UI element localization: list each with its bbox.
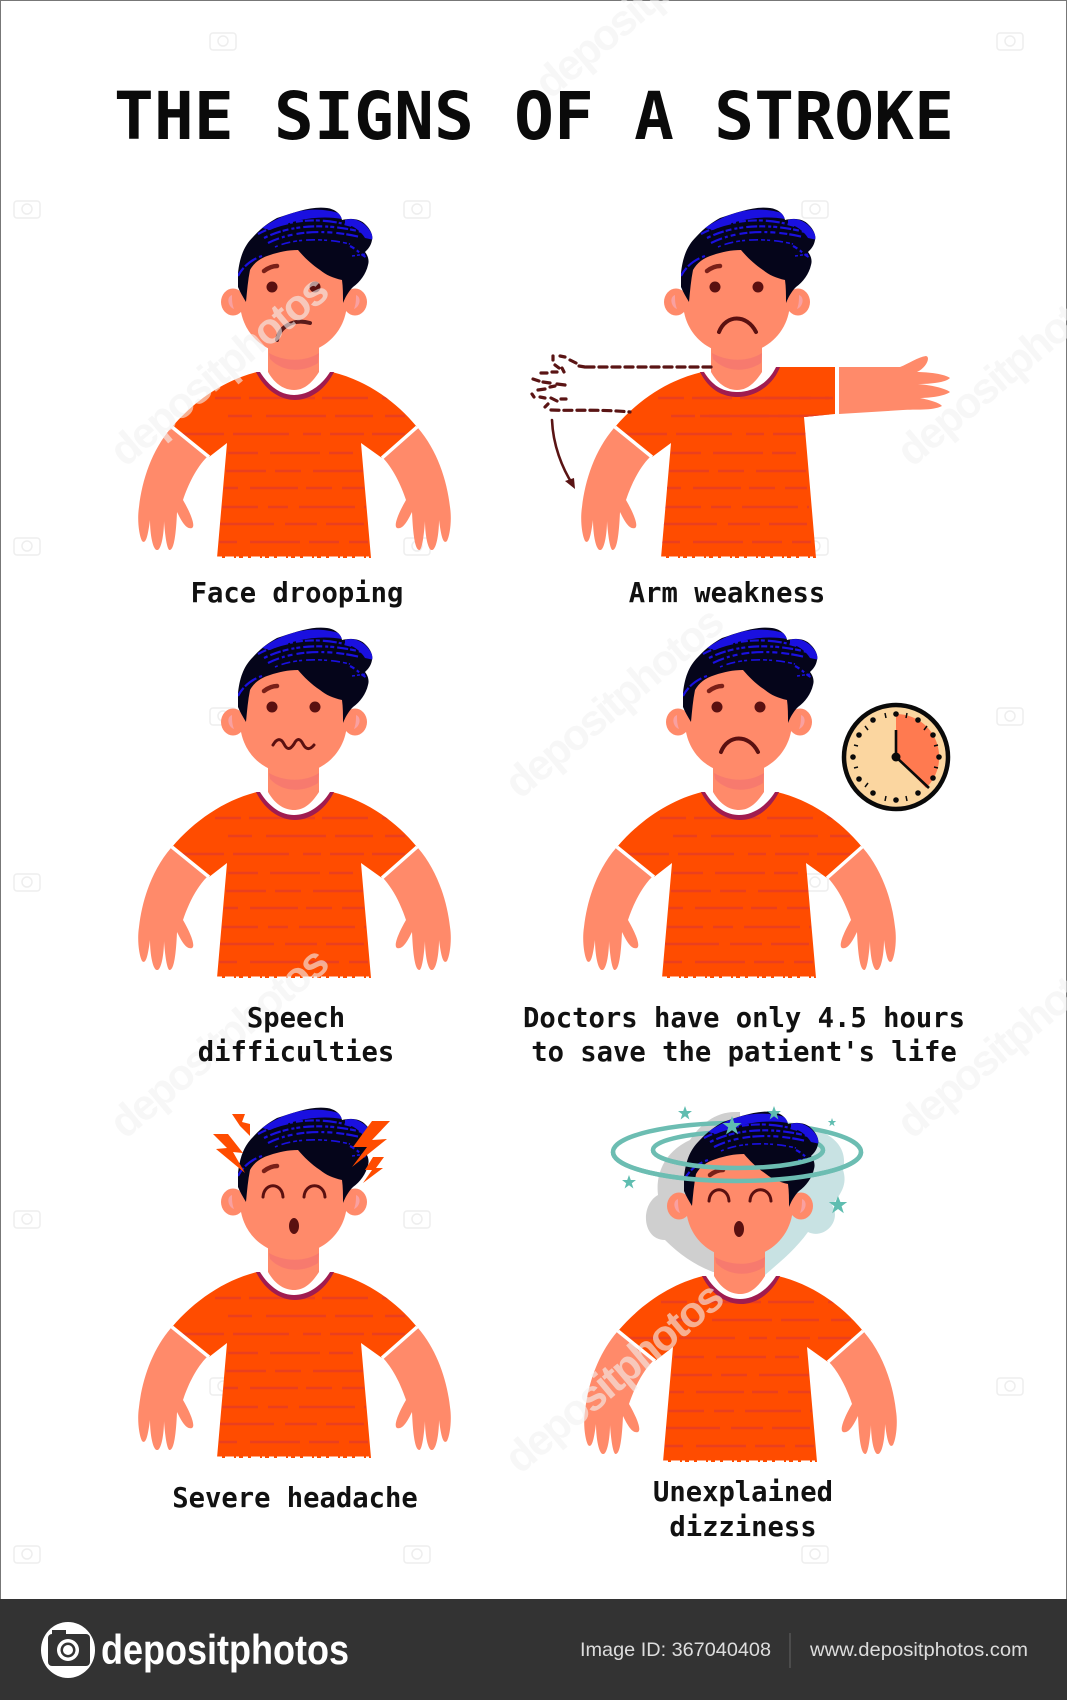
label: unexplained dizziness: dizziness — [669, 1512, 817, 1543]
figure: arm weakness — [532, 208, 950, 558]
rings back — [613, 1123, 861, 1181]
footer bar — [0, 1599, 1067, 1700]
open mouth — [289, 1218, 299, 1234]
website: www.depositphotos.com — [809, 1639, 1028, 1661]
icon: lightning bolts — [213, 1114, 390, 1183]
label: arm weakness: Arm weakness — [629, 578, 825, 609]
diagonal watermarks: depositphotos — [496, 597, 733, 808]
label: doctors time limit: Doctors have only 4.5 hours — [523, 1003, 965, 1034]
label: face drooping: Face drooping — [191, 578, 403, 609]
image id: Image ID: 367040408 — [580, 1639, 771, 1661]
label: unexplained dizziness: Unexplained — [653, 1477, 833, 1508]
label: speech difficulties: Speech — [247, 1003, 345, 1034]
label: severe headache: Severe headache — [172, 1483, 418, 1514]
label: speech difficulties — [198, 1003, 394, 1068]
dashed ghost arm — [532, 356, 711, 485]
dizziness cloud — [646, 1112, 845, 1275]
raised arm — [839, 356, 950, 414]
diagonal watermarks: depositphotos — [101, 265, 338, 476]
arrow: arm falling — [552, 420, 573, 485]
icon: camera logo — [41, 1622, 95, 1678]
label: unexplained dizziness — [653, 1477, 833, 1543]
logo wordmark: depositphotos — [101, 1626, 349, 1673]
label: doctors time limit: to save the patient's life — [531, 1037, 957, 1068]
figure: severe headache — [138, 1108, 451, 1458]
figure: face drooping — [138, 208, 451, 558]
diagonal watermarks — [101, 0, 1067, 1483]
figure: unexplained dizziness — [584, 1112, 897, 1462]
label: speech difficulties: difficulties — [198, 1037, 394, 1068]
figure: doctors time limit — [583, 628, 896, 978]
rings and stars — [613, 1106, 861, 1213]
raised shirt — [615, 360, 848, 558]
icon: clock — [844, 705, 948, 809]
diagonal watermarks: depositphotos — [101, 937, 338, 1148]
diagonal watermarks: depositphotos — [496, 1272, 733, 1483]
title: THE SIGNS OF A STROKE — [114, 78, 954, 155]
figure: speech difficulties — [138, 628, 451, 978]
frowning mouth — [721, 738, 758, 752]
frowning mouth — [719, 318, 756, 332]
label: doctors time limit — [523, 1003, 965, 1068]
wavy mouth — [273, 740, 314, 749]
open mouth — [734, 1221, 744, 1237]
drooping mouth — [277, 322, 310, 340]
